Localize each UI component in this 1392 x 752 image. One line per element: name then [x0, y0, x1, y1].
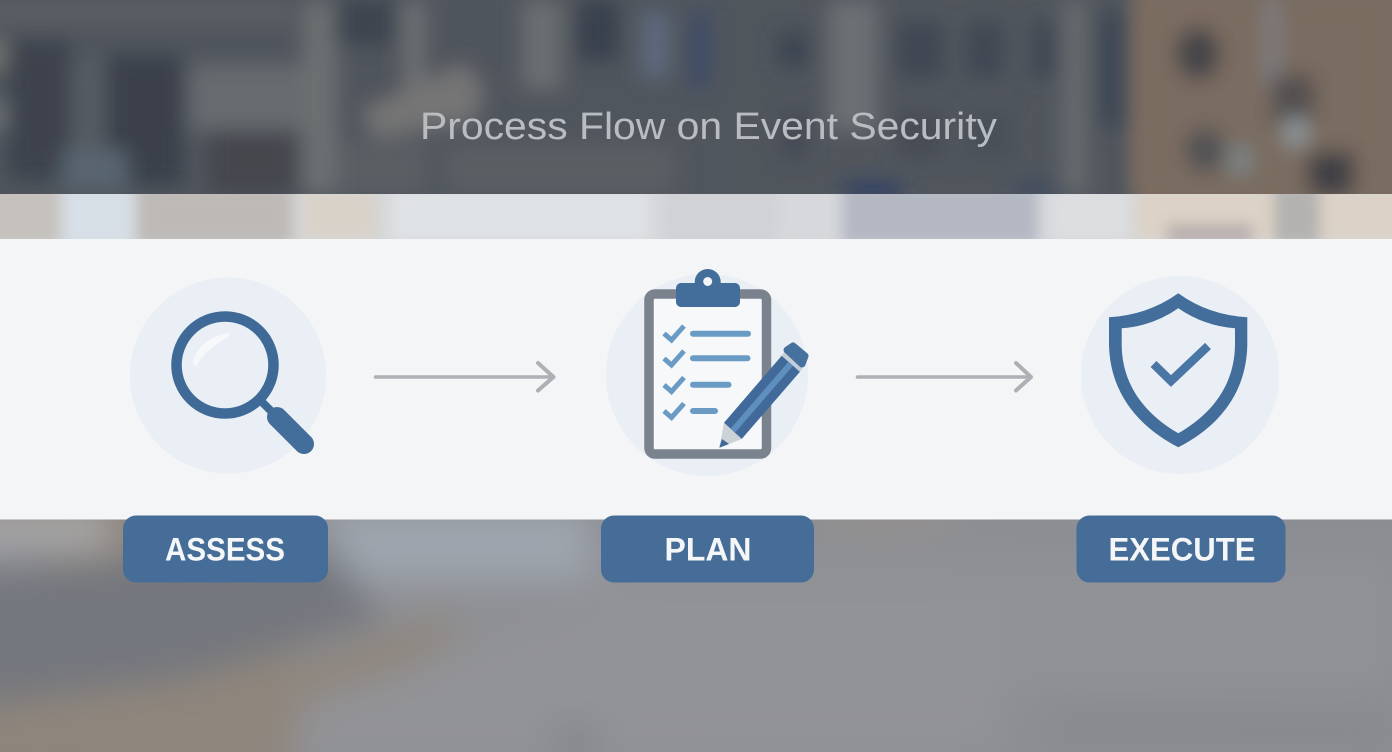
- background: light translucent strip: [0, 194, 1392, 239]
- icon: magnifying glass: [176, 316, 304, 444]
- icon backdrop circle: [130, 278, 326, 474]
- step 1: assess icon: [130, 278, 326, 474]
- background: blurred venue upper band: [0, 0, 1392, 194]
- icon backdrop circle: [1081, 276, 1279, 474]
- label: plan: PLAN: [664, 532, 752, 568]
- step 3: execute icon: [1081, 276, 1279, 474]
- icon: pencil: [719, 346, 805, 448]
- label: plan: [601, 516, 814, 582]
- step 2: plan icon: [606, 269, 808, 476]
- background: blurred table lower band: [0, 520, 1392, 752]
- checklist items: [664, 326, 748, 418]
- label: execute: EXECUTE: [1108, 532, 1256, 568]
- label: assess: [123, 516, 328, 582]
- label: assess: ASSESS: [165, 532, 285, 568]
- arrow: assess to plan: [376, 363, 554, 390]
- title: Process Flow on Event Security: [420, 106, 997, 148]
- icon: check mark: [1154, 346, 1208, 381]
- icon: clipboard: [649, 269, 766, 454]
- panel: white process band: [0, 239, 1392, 520]
- arrow: plan to execute: [858, 363, 1031, 390]
- label: execute: [1076, 516, 1286, 582]
- icon backdrop circle: [606, 274, 808, 476]
- icon: shield: [1109, 293, 1247, 447]
